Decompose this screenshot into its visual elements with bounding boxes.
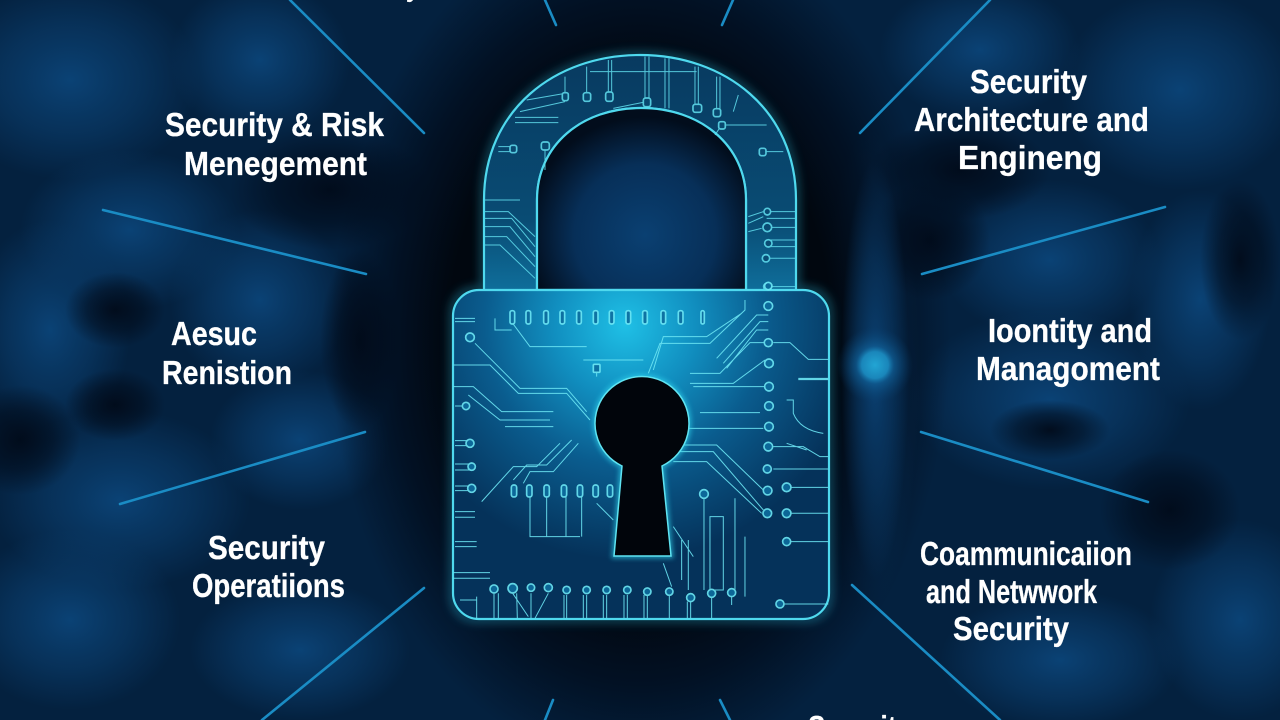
label: Asset Retention: Aesuc bbox=[171, 315, 257, 352]
lock outer glow bbox=[453, 55, 829, 619]
label: Communication and Network Security: and Netwwork bbox=[926, 573, 1097, 610]
label: Security Architecture and Engineering: Security bbox=[970, 63, 1088, 100]
label: Security Operations bbox=[192, 529, 345, 604]
lock body bbox=[453, 282, 829, 619]
label: Communication and Network Security: Security bbox=[953, 610, 1070, 647]
label: Communication and Network Security: Coammunicaiion bbox=[920, 535, 1132, 572]
keyhole bbox=[595, 376, 689, 556]
label: Security Operations: Security bbox=[208, 529, 326, 566]
circuit-board traces bbox=[453, 282, 828, 618]
lock dark halo bbox=[330, 0, 950, 720]
label: Asset Retention bbox=[162, 315, 292, 391]
padlock bbox=[453, 55, 829, 619]
shackle bbox=[484, 55, 796, 292]
shackle opening bbox=[537, 108, 746, 290]
label: Security Architecture and Engineering bbox=[914, 63, 1149, 176]
label: Security Architecture and Engineering: Engineng bbox=[958, 139, 1102, 176]
label: Identity and Management: Managoment bbox=[976, 350, 1160, 387]
vertical light band beside the lock bbox=[841, 160, 909, 580]
label: Security & Risk Management: Security & Risk bbox=[165, 106, 385, 143]
label: Asset Retention: Renistion bbox=[162, 354, 292, 391]
label: Identity and Management bbox=[976, 312, 1160, 387]
label: Security Operations: Operatiions bbox=[192, 567, 345, 604]
label: Identity and Management: Ioontity and bbox=[988, 312, 1152, 349]
label: Communication and Network Security bbox=[920, 535, 1132, 647]
label: Security & Risk Management bbox=[165, 106, 385, 182]
label: Security Architecture and Engineering: Architecture and bbox=[914, 101, 1149, 138]
glowing spot right of the lock bbox=[837, 327, 913, 403]
shackle circuit traces bbox=[485, 57, 795, 290]
label: Security & Risk Management: Menegement bbox=[184, 145, 367, 182]
